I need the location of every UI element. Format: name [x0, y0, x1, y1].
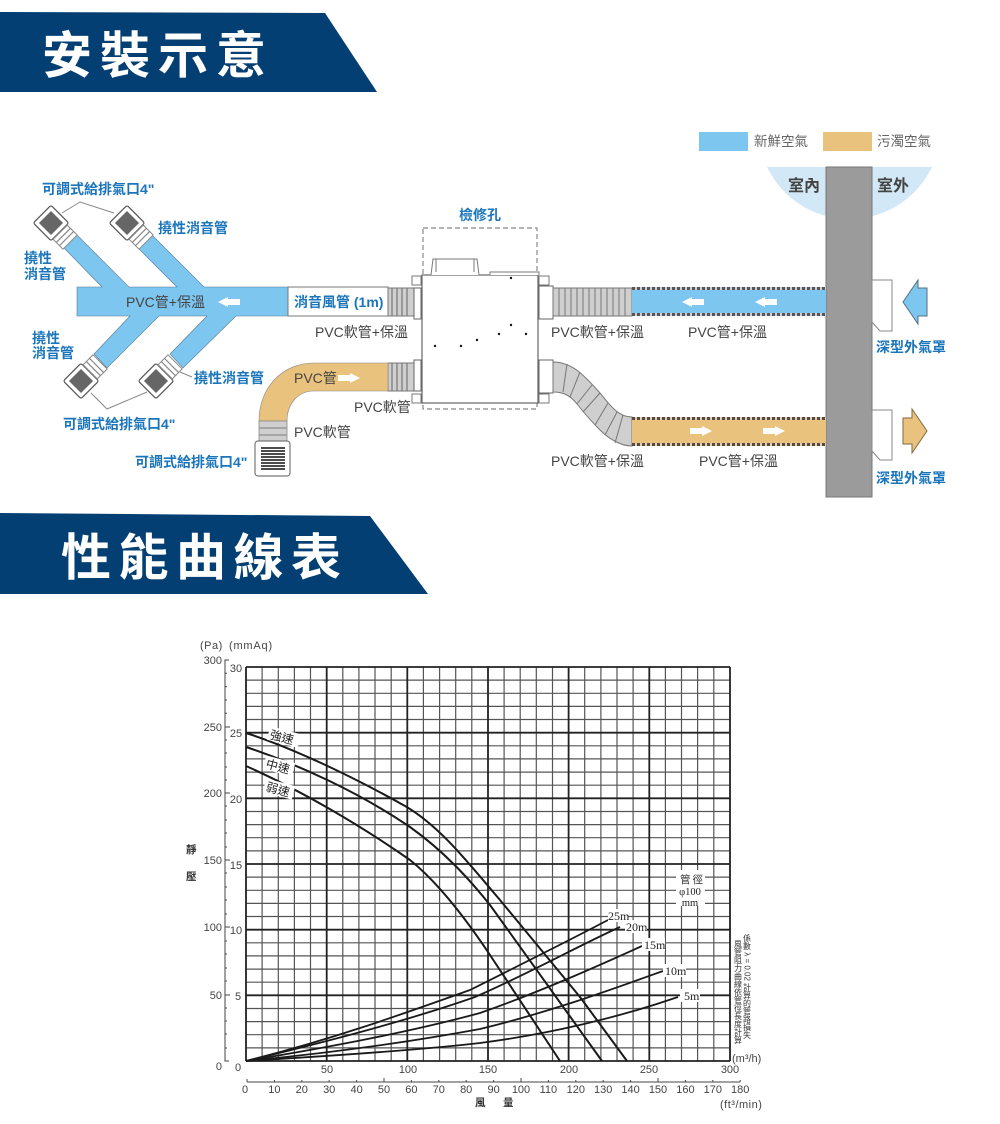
legend — [699, 132, 931, 151]
left axis: 100 — [204, 922, 222, 934]
curve labels: duct length: 5m — [684, 989, 700, 1003]
left axis: 15 — [230, 860, 242, 872]
left axis: 20 — [230, 794, 242, 806]
flexible duct: outlet top — [539, 286, 632, 319]
bottom axis: 90 — [487, 1084, 500, 1096]
label: flexible pvc return: PVC軟管 — [354, 399, 411, 415]
left axis: 壓 — [186, 871, 197, 883]
left axis: 30 — [230, 663, 242, 675]
bottom axis: 20 — [296, 1084, 308, 1096]
left axis: (mmAq) — [229, 640, 273, 652]
minor grid — [246, 667, 730, 1061]
label: adjustable vent lower: 可調式給排氣口4" — [63, 416, 175, 432]
pipe diameter note: mm — [682, 898, 698, 909]
label: flexible pvc insulated right top: PVC軟管+保溫 — [551, 324, 644, 340]
left axis: 5 — [235, 991, 241, 1003]
bottom axis: 150 — [479, 1064, 497, 1076]
label: flexible duct lower left: 消音管 — [32, 345, 74, 361]
curve labels: fan speed — [263, 726, 301, 800]
silencer duct — [288, 287, 388, 316]
bottom axis: 風 — [475, 1097, 486, 1109]
left axis: 0 — [235, 1062, 241, 1074]
bottom axis: 40 — [350, 1084, 363, 1096]
blue branching duct: PVC管+保溫 — [126, 294, 205, 310]
orange insulated pipe — [632, 417, 826, 446]
bottom axis: 140 — [621, 1084, 640, 1096]
label: flexible pvc insulated right bottom: PVC軟管+保溫 — [551, 453, 644, 469]
air outlet: lower left — [63, 353, 109, 399]
label: deep hood bottom: 深型外氣罩 — [876, 470, 946, 486]
indoor and outdoor arcs: 室內 — [788, 176, 820, 195]
wall — [826, 167, 872, 497]
performance chart — [186, 640, 762, 1111]
blue branching duct — [63, 235, 288, 368]
deep hood: bottom — [872, 410, 892, 460]
bottom axis: 60 — [405, 1084, 418, 1096]
curve labels: duct length — [608, 909, 700, 1003]
label: flexible duct lower left: 撓性 — [32, 330, 60, 346]
bottom axis: 80 — [460, 1084, 472, 1096]
bottom axis: 70 — [433, 1084, 445, 1096]
bottom axis: 50 — [378, 1084, 390, 1096]
curve labels: duct length: 25m — [608, 909, 630, 923]
bottom axis — [242, 1053, 762, 1111]
left axis: 10 — [230, 925, 242, 937]
bottom axis: 30 — [323, 1084, 335, 1096]
installation diagram — [24, 167, 946, 497]
curve labels: fan speed: 弱速 — [264, 779, 291, 800]
label: pvc insulated top: PVC管+保溫 — [688, 324, 767, 340]
bottom axis: 100 — [512, 1084, 530, 1096]
indoor and outdoor arcs — [767, 167, 932, 219]
blue insulated pipe — [632, 287, 826, 316]
orange elbow duct: PVC管 — [294, 370, 337, 386]
orange elbow duct — [259, 363, 388, 421]
outlet connector lines — [62, 202, 192, 409]
bottom axis: 100 — [399, 1064, 417, 1076]
banner: 性能曲線表: 性能曲線表 — [61, 530, 348, 586]
curve labels: duct length: 20m — [626, 920, 648, 934]
left axis: (Pa) — [200, 640, 223, 652]
label: flexible pvc insulated left: PVC軟管+保溫 — [315, 324, 408, 340]
banner: 性能曲線表 — [0, 513, 428, 594]
ventilation fan unit — [412, 228, 549, 409]
label: inspection opening: 檢修孔 — [459, 207, 501, 223]
bottom axis: 150 — [649, 1084, 667, 1096]
banner: 安裝示意: 安裝示意 — [42, 28, 274, 84]
label: flexible duct upper right: 撓性消音管 — [158, 220, 228, 236]
vertical duct note: 風管阻力曲線依管徑長度計算 — [734, 940, 742, 1045]
bottom axis: 170 — [704, 1084, 722, 1096]
vertical duct note: 係數 λ = 0.02 計算的管路損失 — [742, 933, 752, 1040]
label: adjustable vent grille: 可調式給排氣口4" — [135, 454, 247, 470]
flexible duct: S-bend — [539, 360, 632, 446]
duct resistance curves — [246, 920, 678, 1061]
label: flexible pvc vent: PVC軟管 — [294, 424, 351, 440]
legend: 污濁空氣 — [877, 134, 931, 149]
label: pvc insulated bottom: PVC管+保溫 — [699, 453, 778, 469]
bottom axis: 200 — [560, 1064, 578, 1076]
left axis: 靜 — [186, 843, 197, 856]
bottom axis: 110 — [540, 1084, 557, 1096]
left axis: 250 — [204, 722, 222, 734]
curve labels: duct length: 15m — [644, 938, 666, 952]
label: flexible duct upper left: 撓性 — [24, 250, 52, 266]
label: flexible duct upper left: 消音管 — [24, 266, 66, 282]
deep hood: top — [872, 280, 892, 331]
label: adjustable vent top: 可調式給排氣口4" — [42, 181, 154, 197]
bottom axis: 50 — [321, 1064, 333, 1076]
arrow: intake — [903, 280, 927, 324]
bottom axis: 10 — [268, 1084, 281, 1096]
banner: 安裝示意 — [0, 12, 377, 92]
bottom axis: 量 — [503, 1097, 514, 1109]
silencer duct: 消音風管 (1m) — [294, 294, 383, 310]
bottom axis: 0 — [242, 1084, 248, 1096]
flexible duct: inlet bottom — [388, 360, 421, 391]
legend: 新鮮空氣 — [754, 134, 808, 149]
air outlet: upper right — [109, 205, 155, 251]
air outlet: upper left — [33, 205, 79, 251]
bottom axis: 300 — [721, 1064, 739, 1076]
flexible duct: inlet top — [388, 288, 421, 319]
bottom axis: 250 — [640, 1064, 658, 1076]
curve labels: fan speed: 中速 — [264, 756, 291, 777]
label: deep hood top: 深型外氣罩 — [876, 339, 946, 355]
bottom axis: 160 — [676, 1084, 695, 1096]
pipe diameter note — [676, 870, 705, 909]
arrow: exhaust — [903, 409, 927, 453]
left axis: 50 — [210, 990, 222, 1002]
flexible hose and grille vent — [255, 421, 290, 476]
air outlet: lower right — [138, 353, 184, 399]
pipe diameter note: 管徑 — [680, 873, 705, 886]
left axis: 300 — [204, 655, 222, 667]
bottom axis: 180 — [731, 1084, 749, 1096]
label: flexible duct lower right: 撓性消音管 — [194, 370, 264, 386]
bottom axis: (ft³/min) — [720, 1099, 762, 1111]
left axis: 150 — [204, 855, 222, 867]
left axis — [186, 640, 273, 1074]
left axis: 0 — [216, 1061, 222, 1073]
bottom axis: (m³/h) — [732, 1053, 761, 1065]
major grid — [246, 667, 730, 1061]
pipe diameter note: φ100 — [679, 887, 701, 898]
left axis: 25 — [230, 728, 242, 740]
left axis: 200 — [204, 788, 222, 800]
indoor and outdoor arcs: 室外 — [877, 176, 909, 195]
fan curves — [246, 733, 627, 1061]
curve labels: duct length: 10m — [665, 964, 687, 978]
curve labels: fan speed: 強速 — [268, 727, 295, 747]
bottom axis: 120 — [567, 1084, 585, 1096]
bottom axis: 130 — [594, 1084, 612, 1096]
